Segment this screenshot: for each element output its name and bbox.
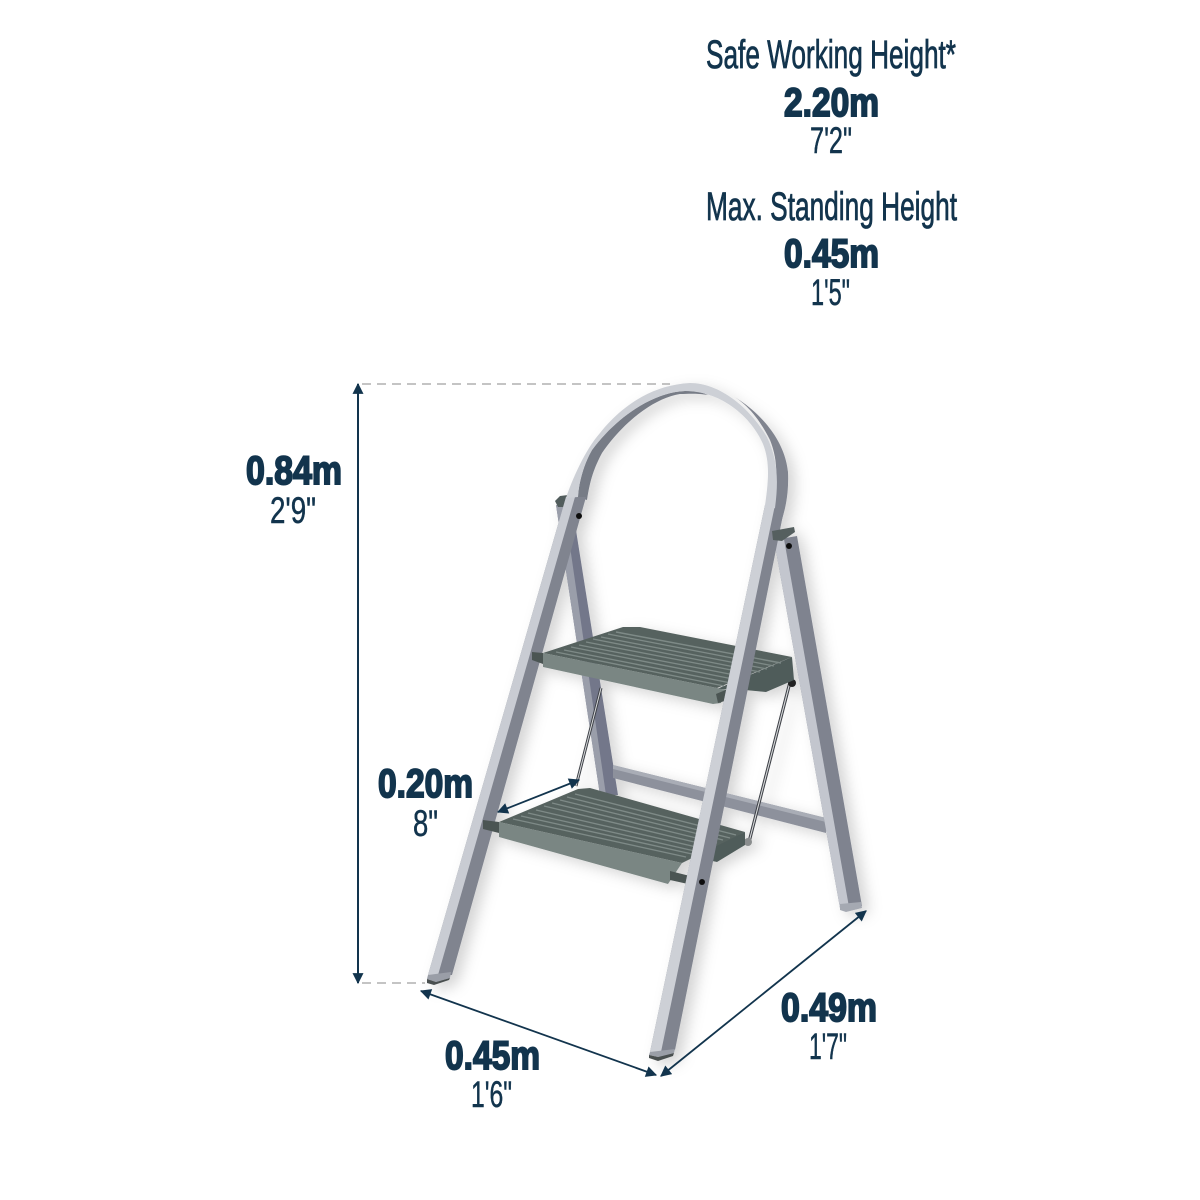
- dimension: step spacing: [378, 762, 579, 844]
- chrome strut: right: [744, 679, 796, 846]
- dimension: step spacing: 8": [413, 803, 438, 844]
- bottom step: [499, 788, 745, 884]
- arch top (light): [566, 383, 777, 512]
- heading: max standing height: [706, 185, 957, 313]
- front right leg: [649, 505, 785, 1061]
- top step: [543, 627, 794, 704]
- dimension: width: 1'6": [471, 1074, 512, 1115]
- rear left leg: [555, 495, 618, 795]
- heading: safe working height: 2.20m: [784, 81, 879, 125]
- top right cap and rivets: [772, 527, 795, 549]
- rear right leg: [774, 536, 862, 912]
- step pins on left leg: [483, 652, 543, 833]
- heading: max standing height: 1'5": [811, 272, 850, 313]
- dimension: depth: [661, 911, 877, 1076]
- heading: safe working height: [706, 33, 956, 161]
- heading: safe working height: Safe Working Height*: [706, 33, 956, 77]
- dimension: depth: 1'7": [809, 1026, 847, 1067]
- heading: safe working height: 7'2": [810, 120, 852, 161]
- dimension: depth: 0.49m: [781, 986, 877, 1030]
- heading: max standing height: 0.45m: [784, 232, 879, 276]
- step stool illustration: [427, 383, 862, 1061]
- dimension: width: [421, 991, 656, 1115]
- front left leg: [427, 497, 586, 985]
- dimension: overall height: [246, 384, 670, 983]
- heading: max standing height: Max. Standing Height: [706, 185, 957, 229]
- dimension: overall height: 0.84m: [246, 449, 342, 493]
- dimension: width: 0.45m: [445, 1034, 540, 1078]
- chrome strut: upper left: [576, 688, 601, 786]
- arch back (dark): [578, 391, 788, 550]
- rear cross bar: [613, 765, 826, 833]
- dimension: step spacing: 0.20m: [378, 762, 473, 806]
- dimension: overall height: 2'9": [270, 490, 316, 531]
